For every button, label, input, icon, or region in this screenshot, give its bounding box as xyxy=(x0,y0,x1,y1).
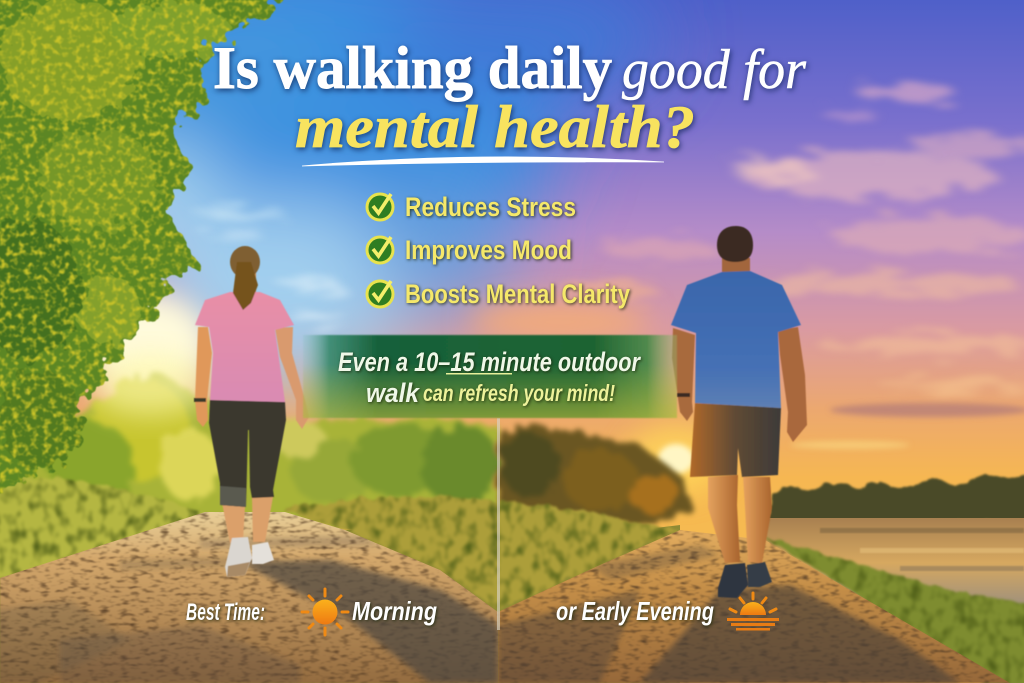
label: best time: Best Time: xyxy=(186,599,265,626)
banner background xyxy=(303,335,677,418)
woman legs xyxy=(222,497,273,543)
woman shirt xyxy=(195,292,294,402)
woman right arm xyxy=(275,327,309,429)
words: can refresh your mind: can refresh your mind! xyxy=(423,380,615,406)
man walking xyxy=(671,226,807,598)
far tree line xyxy=(770,472,1024,522)
trees behind the woman xyxy=(0,372,500,530)
sunlight haze on the trees xyxy=(90,355,210,415)
title line one: Is walking daily xyxy=(213,35,612,101)
right grass verge xyxy=(762,536,1024,683)
woman knee sleeve xyxy=(220,486,246,507)
woman head xyxy=(230,246,260,278)
title underline xyxy=(302,157,664,166)
woman leggings xyxy=(209,400,286,507)
title xyxy=(213,35,806,160)
man shorts xyxy=(690,403,781,477)
benefit: boosts mental clarity: Boosts Mental Clarity xyxy=(405,279,630,309)
horizon streak xyxy=(790,403,1024,449)
man watch xyxy=(677,393,690,397)
title italic words: good for xyxy=(622,39,806,101)
benefit: reduces stress: Reduces Stress xyxy=(405,192,576,222)
woman watch xyxy=(194,398,206,402)
check: reduces stress xyxy=(367,194,393,220)
check: boosts mental clarity xyxy=(367,281,393,307)
icon: evening sunset xyxy=(727,593,779,630)
lake water xyxy=(760,518,1024,618)
check: improves mood xyxy=(367,237,393,263)
banner line two xyxy=(366,378,615,408)
man left arm xyxy=(672,328,695,421)
woman left arm xyxy=(195,327,212,427)
man shirt xyxy=(671,271,801,408)
left walking path xyxy=(0,505,500,683)
divider line between morning and evening scenes xyxy=(497,418,500,630)
man shoes xyxy=(718,562,772,598)
man neck xyxy=(722,258,750,274)
woman shoes xyxy=(225,537,274,577)
woman walking xyxy=(194,246,309,577)
man head xyxy=(717,226,753,262)
setting sun glow xyxy=(626,424,726,496)
green banner xyxy=(303,335,677,418)
best time row xyxy=(186,589,779,635)
icon: morning sun xyxy=(302,589,348,635)
banner line one: Even a 10–15 minute outdoor xyxy=(338,347,641,377)
benefit list xyxy=(367,192,630,309)
banner highlight underline xyxy=(446,373,512,374)
centre grass verge xyxy=(282,496,678,610)
label: or early evening: or Early Evening xyxy=(556,596,714,626)
trees behind the seam xyxy=(498,425,695,525)
word: walk: walk xyxy=(366,378,421,408)
benefit: improves mood: Improves Mood xyxy=(405,235,572,265)
oak tree canopy xyxy=(0,0,285,495)
woman neck xyxy=(236,272,256,292)
man legs xyxy=(708,475,772,563)
woman ponytail xyxy=(233,262,258,310)
ground underlay xyxy=(0,525,680,683)
right walking path xyxy=(498,525,1024,683)
man right arm xyxy=(778,327,807,442)
title line two: mental health? xyxy=(295,94,695,160)
label: morning: Morning xyxy=(352,596,437,626)
left grass verge xyxy=(0,475,210,582)
clouds xyxy=(195,81,1024,392)
